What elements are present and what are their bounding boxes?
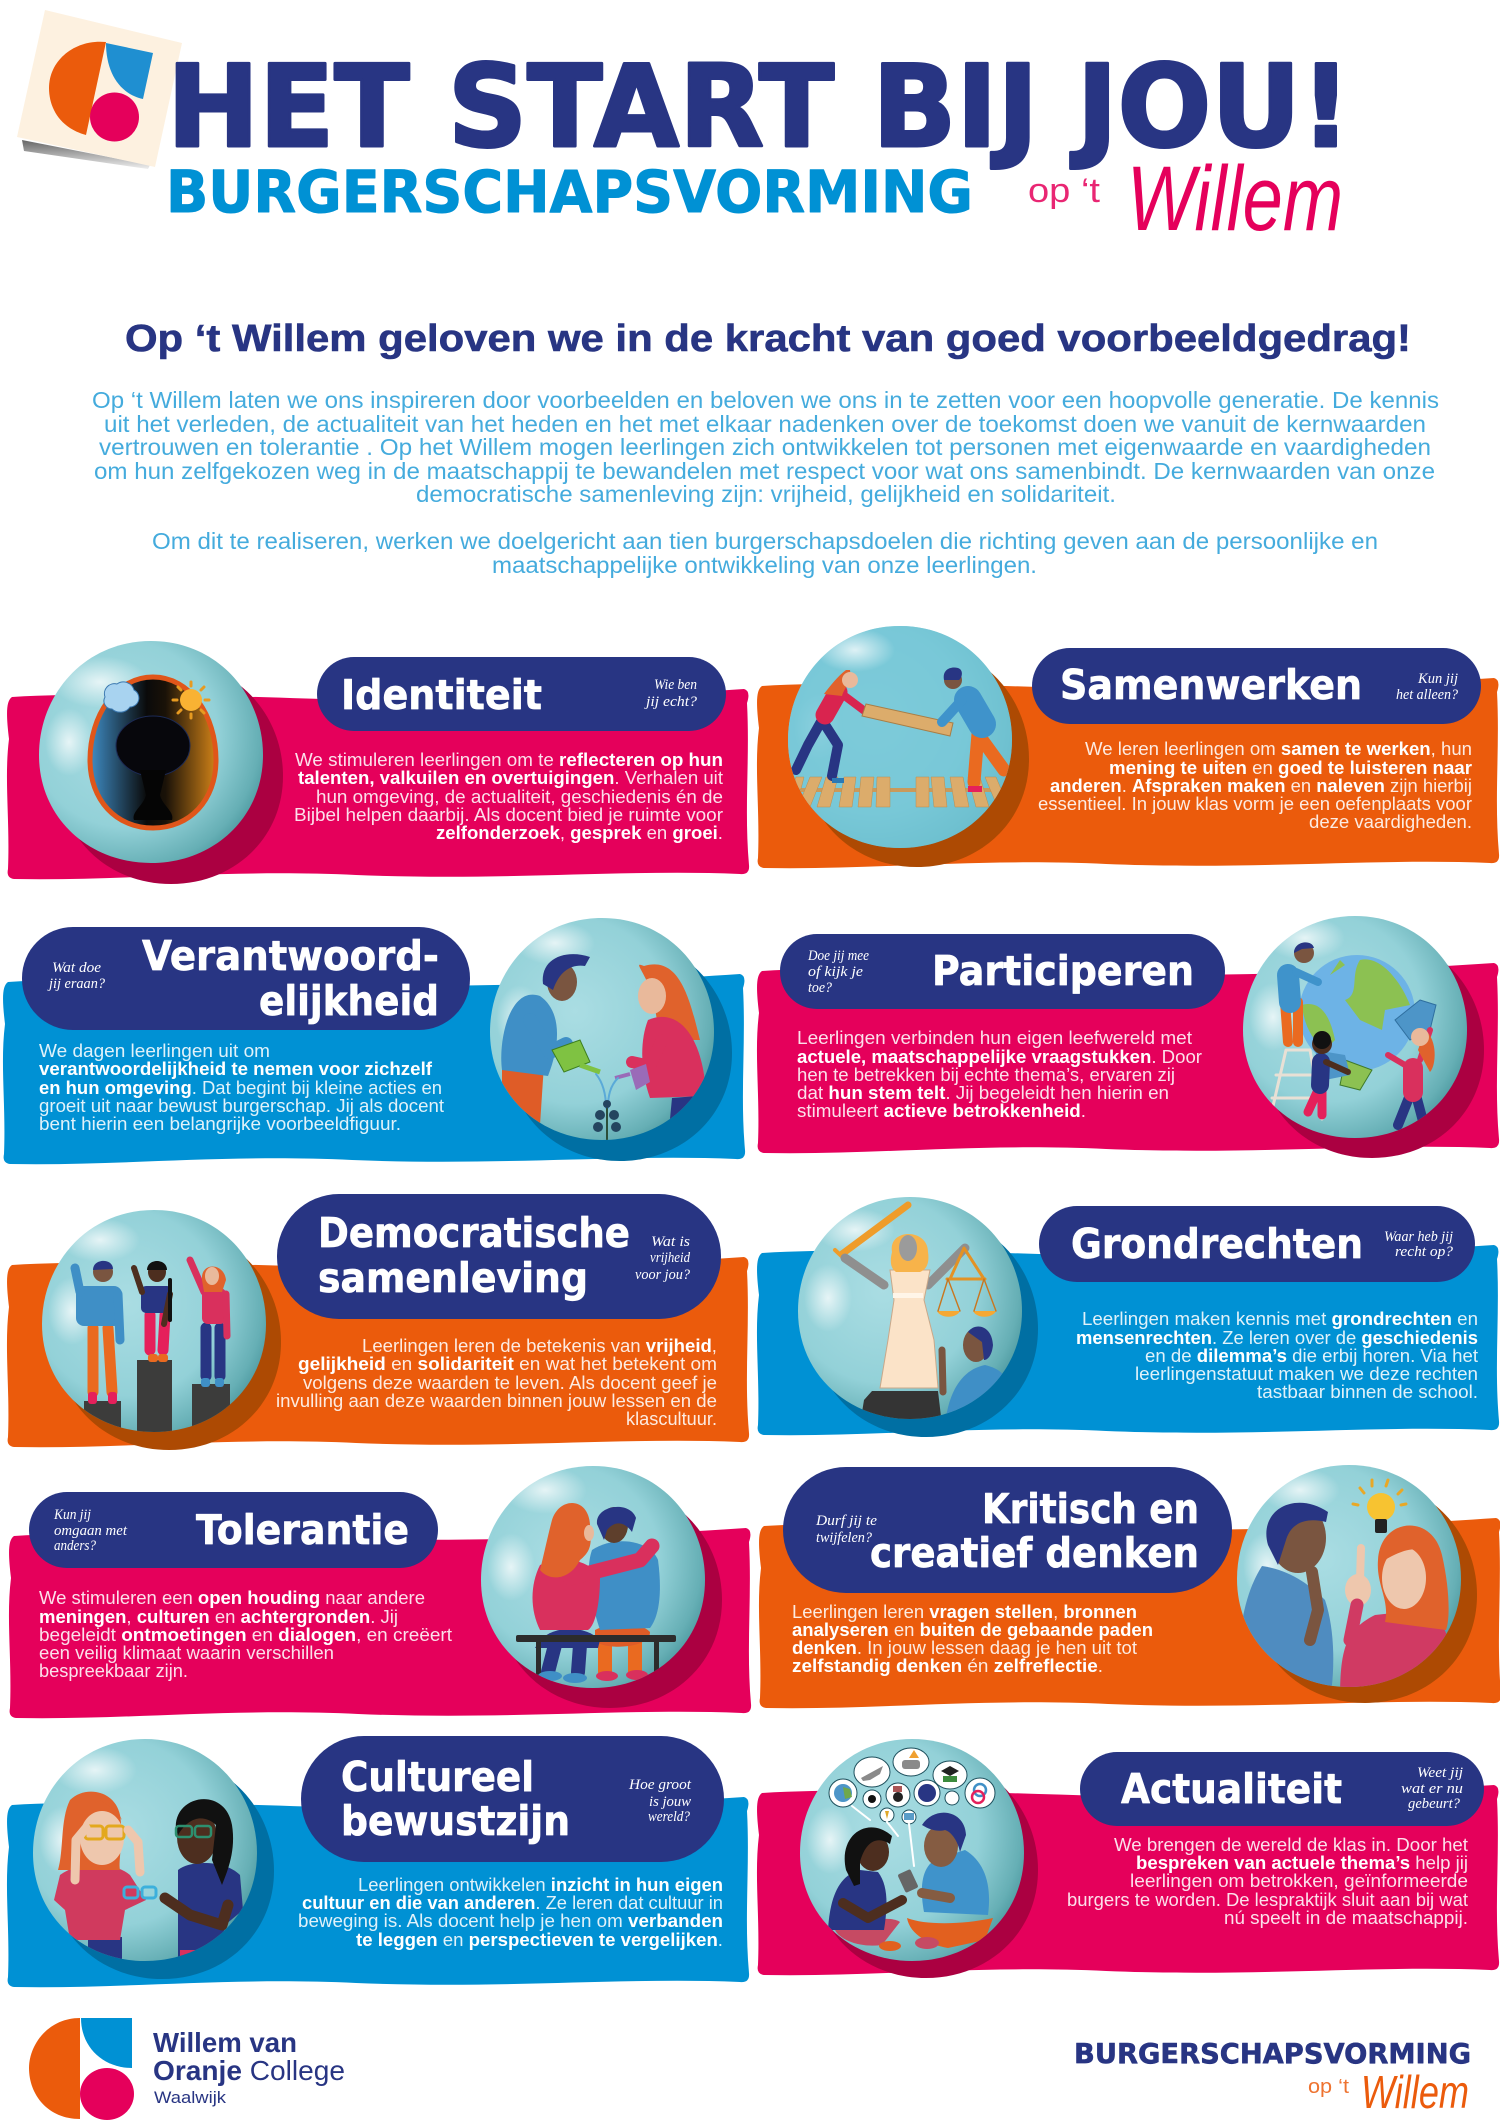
- band: [7, 1797, 749, 1987]
- body text: zelfonderzoek, gesprek en groei.: [436, 823, 723, 843]
- egg: [800, 1739, 1024, 1961]
- question: recht op?: [1395, 1244, 1454, 1260]
- question: vrijheid: [650, 1250, 690, 1266]
- body text: begeleidt ontmoetingen en dialogen, en creëert: [39, 1625, 452, 1645]
- title: [318, 1209, 630, 1302]
- body text: deze vaardigheden.: [1309, 812, 1472, 832]
- panel: Identiteit: [7, 641, 749, 884]
- title: [341, 1753, 570, 1845]
- intro text: om hun zelfgekozen weg in de maatschappij te bewandelen met respect voor wat ons samenbindt. De kernwaarden van onze: [94, 458, 1435, 484]
- pill heading: [317, 657, 726, 731]
- body text: Leerlingen leren vragen stellen, bronnen: [792, 1602, 1137, 1622]
- header: [17, 10, 1351, 250]
- band: [9, 1528, 751, 1718]
- body text: We stimuleren een open houding naar andere: [39, 1588, 425, 1608]
- body text: [797, 1028, 1202, 1121]
- question: Hoe groot: [628, 1777, 692, 1793]
- body text: verantwoordelijkheid te nemen voor zichzelf: [39, 1059, 433, 1079]
- egg: [798, 1197, 1022, 1419]
- question: anders?: [54, 1538, 96, 1554]
- pill heading: [277, 1194, 721, 1319]
- icon: sticky note with logo: [17, 10, 182, 169]
- question: voor jou?: [635, 1267, 690, 1283]
- band: [3, 974, 745, 1164]
- body text: dat hun stem telt . Jij begeleidt hen hierin en: [797, 1083, 1169, 1103]
- panel: Grondrechten: [757, 1197, 1499, 1437]
- body text: denken. In jouw lessen daag je hen uit tot: [792, 1638, 1137, 1658]
- pill heading: [1039, 1206, 1475, 1282]
- footer logo: [29, 2018, 345, 2120]
- body text: mening te uiten en goed te luisteren naar: [1109, 758, 1472, 778]
- band: [7, 689, 749, 879]
- footer tagline: [1074, 2037, 1471, 2118]
- body text: [39, 1041, 444, 1134]
- school name: [153, 2027, 345, 2107]
- band: [7, 1257, 749, 1447]
- question: [815, 1513, 877, 1546]
- egg shadow: [805, 645, 1029, 867]
- pill heading: [1032, 648, 1481, 724]
- body text: leerlingen om betrokken, geïnformeerde: [1130, 1871, 1468, 1891]
- body text: analyseren en buiten de gebaande paden: [792, 1620, 1153, 1640]
- question: Wie ben: [654, 677, 697, 693]
- body text: Leerlingen ontwikkelen inzicht in hun eigen: [358, 1875, 723, 1895]
- egg shadow: [814, 1756, 1038, 1978]
- intro text: maatschappelijke ontwikkeling van onze leerlingen.: [492, 552, 1037, 578]
- tagline: op 't: op ‘t: [1028, 172, 1101, 210]
- body text: volgens deze waarden te leven. Als docent geef je: [303, 1373, 717, 1393]
- body text: meningen, culturen en achtergronden. Jij: [39, 1607, 398, 1627]
- body text: We dagen leerlingen uit om: [39, 1041, 270, 1061]
- body text: Leerlingen maken kennis met grondrechten en: [1082, 1309, 1478, 1329]
- body text: We stimuleren leerlingen om te reflecteren op hun: [295, 750, 723, 770]
- band: [757, 963, 1499, 1153]
- band: [759, 1518, 1500, 1708]
- body text: [1076, 1309, 1478, 1402]
- panel: Kritisch en creatief denken: [759, 1465, 1500, 1708]
- title: creatief denken: [870, 1529, 1199, 1577]
- question: Doe jij mee: [807, 948, 869, 964]
- illustration: mirror with silhouette: [52, 656, 216, 828]
- body text: Leerlingen verbinden hun eigen leefwereld met: [797, 1028, 1192, 1048]
- body text: [276, 1336, 717, 1429]
- question: Wat is: [651, 1234, 690, 1250]
- egg: [42, 1210, 266, 1432]
- heading: Op ‘t Willem geloven we in de kracht van goed voorbeeldgedrag!: [125, 318, 1411, 360]
- body text: stimuleert actieve betrokkenheid .: [797, 1101, 1086, 1121]
- illustration: two friends on a bench: [503, 1466, 676, 1683]
- question: wat er nu: [1401, 1781, 1463, 1797]
- question: [807, 948, 869, 996]
- question: [1396, 671, 1458, 703]
- illustration: two people building a bridge: [788, 626, 1012, 848]
- body text: anderen. Afspraken maken en naleven zijn hierbij: [1050, 776, 1472, 796]
- body text: en hun omgeving. Dat begint bij kleine acties en: [39, 1078, 442, 1098]
- question: toe?: [808, 980, 832, 996]
- illustration: watering a plant: [501, 921, 706, 1142]
- intro text: [92, 387, 1439, 578]
- question: omgaan met: [54, 1523, 128, 1539]
- question: jij eraan?: [47, 976, 105, 992]
- egg: [33, 1739, 257, 1961]
- egg shadow: [1253, 1481, 1477, 1703]
- title: bewustzijn: [341, 1797, 570, 1845]
- body text: [1067, 1835, 1468, 1928]
- question: [644, 677, 698, 710]
- title: Grondrechten: [1071, 1220, 1363, 1268]
- intro text: Om dit te realiseren, werken we doelgericht aan tien burgerschapsdoelen die richting geven aan de persoonlijke en: [152, 528, 1378, 554]
- panel: Cultureel bewustzijn: [7, 1736, 749, 1987]
- question: is jouw: [649, 1794, 691, 1810]
- body text: een veilig klimaat waarin verschillen: [39, 1643, 334, 1663]
- body text: invulling aan deze waarden binnen jouw lessen en de: [276, 1391, 717, 1411]
- body text: te leggen en perspectieven te vergelijken .: [356, 1930, 723, 1950]
- egg: [1243, 916, 1467, 1138]
- title: [142, 932, 439, 1025]
- egg: [39, 641, 263, 863]
- question: of kijk je: [808, 964, 863, 980]
- body text: [1038, 739, 1472, 832]
- question: gebeurt?: [1408, 1796, 1460, 1812]
- school name: Willem van: [153, 2027, 297, 2058]
- panel: Tolerantie: [9, 1466, 751, 1718]
- body text: essentieel. In jouw klas vorm je een oefenplaats voor: [1038, 794, 1472, 814]
- illustration: lady justice: [815, 1205, 1011, 1425]
- body text: actuele, maatschappelijke vraagstukken . Door: [797, 1047, 1202, 1067]
- title: Identiteit: [341, 671, 542, 719]
- egg shadow: [814, 1215, 1038, 1437]
- title: [870, 1485, 1199, 1577]
- panel: Verantwoordelijkheid: [3, 918, 745, 1164]
- band: [757, 1785, 1499, 1975]
- egg shadow: [498, 1486, 722, 1708]
- panel: Participeren: [757, 916, 1499, 1158]
- pill heading: [1080, 1752, 1484, 1826]
- egg: [788, 626, 1012, 848]
- egg shadow: [508, 939, 732, 1161]
- subtitle: BURGERSCHAPSVORMING: [166, 158, 973, 226]
- body text: hun omgeving, de actualiteit, geschiedenis én de: [316, 787, 723, 807]
- body text: [294, 750, 723, 843]
- title: Kritisch en: [982, 1485, 1199, 1533]
- panel: Actualiteit: [757, 1739, 1499, 1978]
- question: [1401, 1765, 1463, 1812]
- title: Actualiteit: [1121, 1765, 1342, 1813]
- pill heading: [783, 1467, 1232, 1593]
- body text: gelijkheid en solidariteit en wat het betekent om: [298, 1354, 717, 1374]
- title: Samenwerken: [1060, 661, 1362, 709]
- question: Durf jij te: [815, 1513, 877, 1529]
- title: HET START BIJ JOU!: [167, 41, 1351, 173]
- body text: bespreken van actuele thema’s help jij: [1136, 1853, 1468, 1873]
- title: Participeren: [932, 947, 1194, 995]
- footer tagline: BURGERSCHAPSVORMING: [1074, 2037, 1471, 2070]
- body text: en de dilemma’s die erbij horen. Via het: [1145, 1346, 1478, 1366]
- body text: Leerlingen leren de betekenis van vrijheid,: [362, 1336, 717, 1356]
- egg shadow: [50, 1757, 274, 1979]
- intro text: uit het verleden, de actualiteit van het heden en het met elkaar nadenken over de toekomst doen we vanuit de kernwaarden: [104, 411, 1426, 437]
- footer tagline: Willem: [1361, 2066, 1469, 2118]
- pill heading: [29, 1492, 438, 1568]
- question: Kun jij: [1417, 671, 1458, 687]
- question: [53, 1507, 128, 1554]
- body text: bent hierin een belangrijke voorbeeldfiguur.: [39, 1114, 401, 1134]
- question: Waar heb jij: [1384, 1229, 1453, 1245]
- body text: Bijbel helpen daarbij. Als docent bied je ruimte voor: [294, 805, 723, 825]
- body text: talenten, valkuilen en overtuigingen . Verhalen uit: [298, 768, 723, 788]
- egg shadow: [59, 662, 283, 884]
- intro text: vertrouwen en tolerantie . Op het Willem mogen leerlingen zich ontwikkelen tot personen met eigenwaarde en vaardigheden: [99, 434, 1431, 460]
- egg: [481, 1466, 705, 1688]
- body text: beweging is. Als docent help je hen om verbanden: [298, 1911, 723, 1931]
- illustration: puzzle globe: [1265, 916, 1436, 1125]
- question: [47, 960, 105, 992]
- panel: Samenwerken: [757, 626, 1499, 868]
- body text: leerlingenstatuut maken we deze rechten: [1135, 1364, 1478, 1384]
- pill heading: [301, 1736, 724, 1862]
- egg: [1237, 1465, 1461, 1687]
- tagline: Willem: Willem: [1127, 148, 1343, 250]
- body text: We brengen de wereld de klas in. Door het: [1114, 1835, 1468, 1855]
- body text: zelfstandig denken én zelfreflectie .: [792, 1656, 1103, 1676]
- band: [757, 678, 1499, 868]
- title: Cultureel: [341, 1753, 534, 1801]
- title: Democratische: [318, 1209, 630, 1257]
- title: Verantwoord-: [142, 932, 439, 980]
- intro text: Op ‘t Willem laten we ons inspireren door voorbeelden en beloven we ons in te zetten voor een hoopvolle generatie. De kennis: [92, 387, 1439, 413]
- illustration: two students with news bubbles: [828, 1748, 995, 1951]
- question: Weet jij: [1417, 1765, 1463, 1781]
- body text: cultuur en die van anderen. Ze leren dat cultuur in: [302, 1893, 723, 1913]
- question: [628, 1777, 692, 1825]
- question: twijfelen?: [816, 1530, 872, 1546]
- question: [1384, 1229, 1454, 1260]
- egg: [490, 918, 714, 1140]
- body text: hen te betrekken bij echte thema’s, ervaren zij: [797, 1065, 1175, 1085]
- panel: Democratische samenleving: [7, 1194, 749, 1450]
- body text: tastbaar binnen de school.: [1257, 1382, 1478, 1402]
- question: het alleen?: [1396, 687, 1458, 703]
- body text: mensenrechten. Ze leren over de geschiedenis: [1076, 1328, 1478, 1348]
- icon: school logo: [29, 2018, 134, 2120]
- illustration: three people on pedestals: [60, 1218, 230, 1441]
- school name: Oranje College: [153, 2055, 345, 2086]
- illustration: trying on glasses: [53, 1746, 243, 1965]
- illustration: thinking teenagers with light bulb: [1243, 1472, 1449, 1687]
- egg shadow: [57, 1228, 281, 1450]
- body text: [298, 1875, 723, 1950]
- title: samenleving: [318, 1254, 588, 1302]
- body text: [39, 1588, 452, 1681]
- body text: bespreekbaar zijn.: [39, 1661, 188, 1681]
- footer tagline: op ‘t: [1308, 2076, 1349, 2098]
- title: Tolerantie: [196, 1506, 409, 1554]
- pill heading: [22, 927, 470, 1030]
- body text: burgers te worden. De lespraktijk sluit aan bij wat: [1067, 1890, 1468, 1910]
- band: [757, 1245, 1499, 1435]
- egg shadow: [1260, 936, 1484, 1158]
- question: [635, 1234, 690, 1283]
- question: Kun jij: [53, 1507, 91, 1523]
- school name: Waalwijk: [154, 2088, 227, 2107]
- body text: We leren leerlingen om samen te werken , hun: [1085, 739, 1472, 759]
- question: jij echt?: [644, 694, 698, 710]
- body text: nú speelt in de maatschappij.: [1224, 1908, 1468, 1928]
- intro text: democratische samenleving zijn: vrijheid, gelijkheid en solidariteit.: [416, 481, 1116, 507]
- body text: klascultuur.: [626, 1409, 717, 1429]
- question: wereld?: [648, 1809, 690, 1825]
- body text: [792, 1602, 1153, 1676]
- body text: groeit uit naar bewust burgerschap. Jij als docent: [39, 1096, 444, 1116]
- question: Wat doe: [52, 960, 101, 976]
- title: elijkheid: [259, 977, 439, 1025]
- pill heading: [780, 934, 1225, 1009]
